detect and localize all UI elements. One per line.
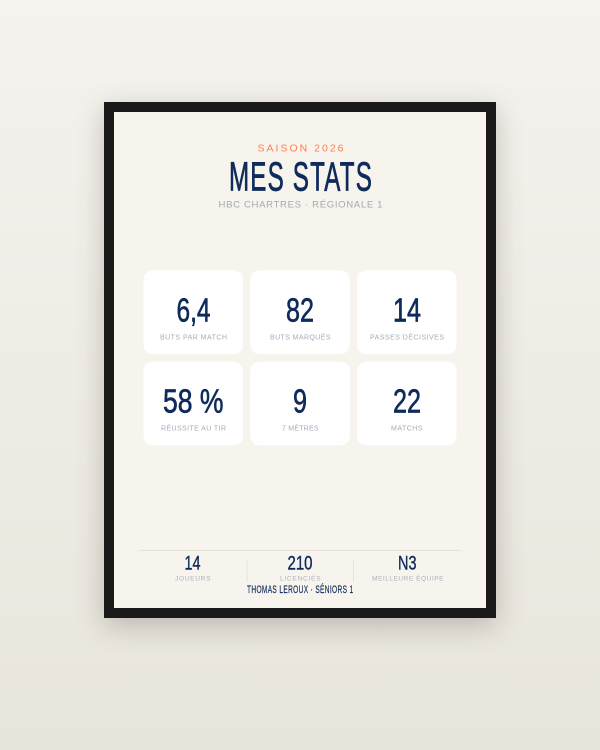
poster paper panel	[114, 112, 486, 608]
card: buts marqués	[250, 270, 350, 354]
card: matchs	[357, 362, 456, 445]
label: RÉUSSITE AU TIR	[161, 424, 226, 433]
card: 7 mètres	[250, 362, 350, 445]
label: JOUEURS	[175, 576, 211, 582]
label: LICENCIÉS	[280, 574, 321, 582]
card: passes décisives	[357, 270, 456, 354]
value: 14	[184, 552, 201, 574]
value: N3	[398, 552, 416, 574]
value: 22	[393, 384, 421, 421]
subtitle: HBC CHARTRES · RÉGIONALE 1	[218, 200, 382, 210]
value: 14	[393, 292, 421, 329]
poster frame	[104, 102, 496, 618]
value: 6,4	[176, 292, 210, 329]
card: réussite au tir	[144, 362, 243, 445]
label: PASSES DÉCISIVES	[370, 332, 444, 341]
stat: joueurs	[175, 552, 211, 582]
stat: licenciés	[280, 552, 321, 582]
value: 82	[286, 292, 314, 329]
stat cards grid	[144, 270, 456, 445]
label: BUTS PAR MATCH	[160, 334, 227, 341]
value: 210	[288, 552, 313, 574]
stat: meilleure équipe	[372, 552, 444, 582]
label: 7 MÈTRES	[282, 424, 319, 433]
label: MEILLEURE ÉQUIPE	[372, 574, 444, 582]
title: MES STATS	[229, 154, 373, 200]
value: 58 %	[163, 384, 224, 421]
label: BUTS MARQUÉS	[270, 332, 331, 341]
header	[218, 143, 382, 210]
season label: SAISON 2026	[258, 143, 344, 155]
card: buts par match	[144, 270, 243, 354]
value: 9	[293, 384, 307, 421]
label: MATCHS	[391, 426, 423, 433]
player name: THOMAS LEROUX · SÉNIORS 1	[247, 583, 354, 596]
footer stats	[139, 550, 461, 596]
